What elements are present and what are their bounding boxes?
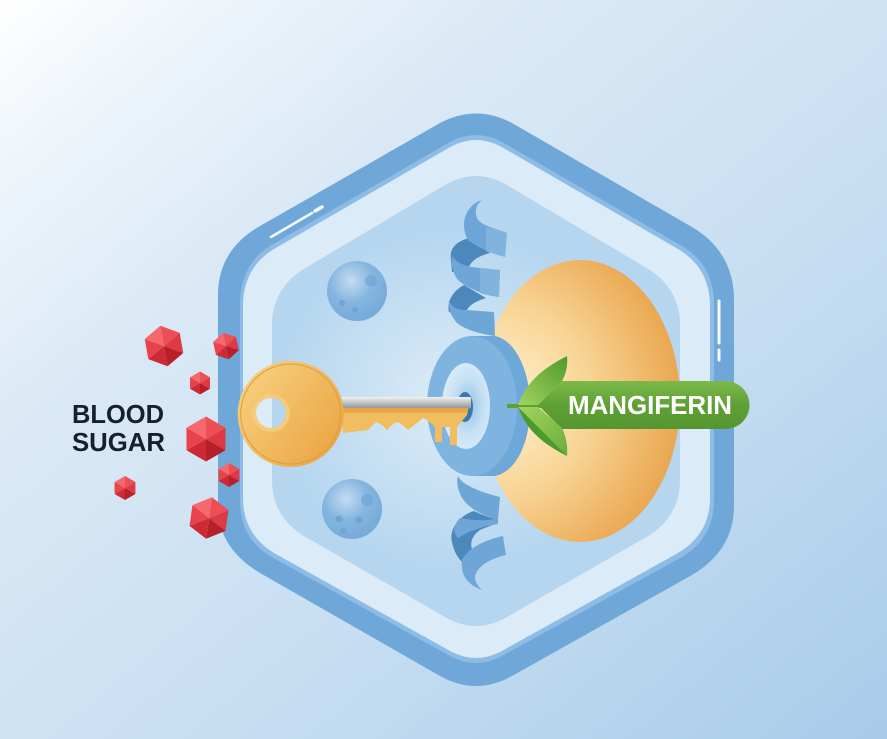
orange protein body (480, 260, 680, 542)
label: blood sugar: BLOOD (72, 401, 164, 429)
helix bottom (451, 476, 506, 590)
label: sugar: SUGAR (72, 429, 165, 457)
blood sugar molecules (115, 323, 240, 541)
helix top (449, 200, 507, 336)
mangiferin arrow: MANGIFERIN (568, 392, 732, 420)
cell inner cytoplasm (272, 176, 680, 626)
mangiferin arrow (507, 356, 750, 456)
key (238, 361, 471, 467)
cell outer membrane (218, 114, 734, 686)
receptor ring (427, 336, 530, 476)
membrane highlights (271, 207, 719, 360)
vesicle top (327, 261, 387, 321)
vesicle bottom (322, 479, 382, 539)
